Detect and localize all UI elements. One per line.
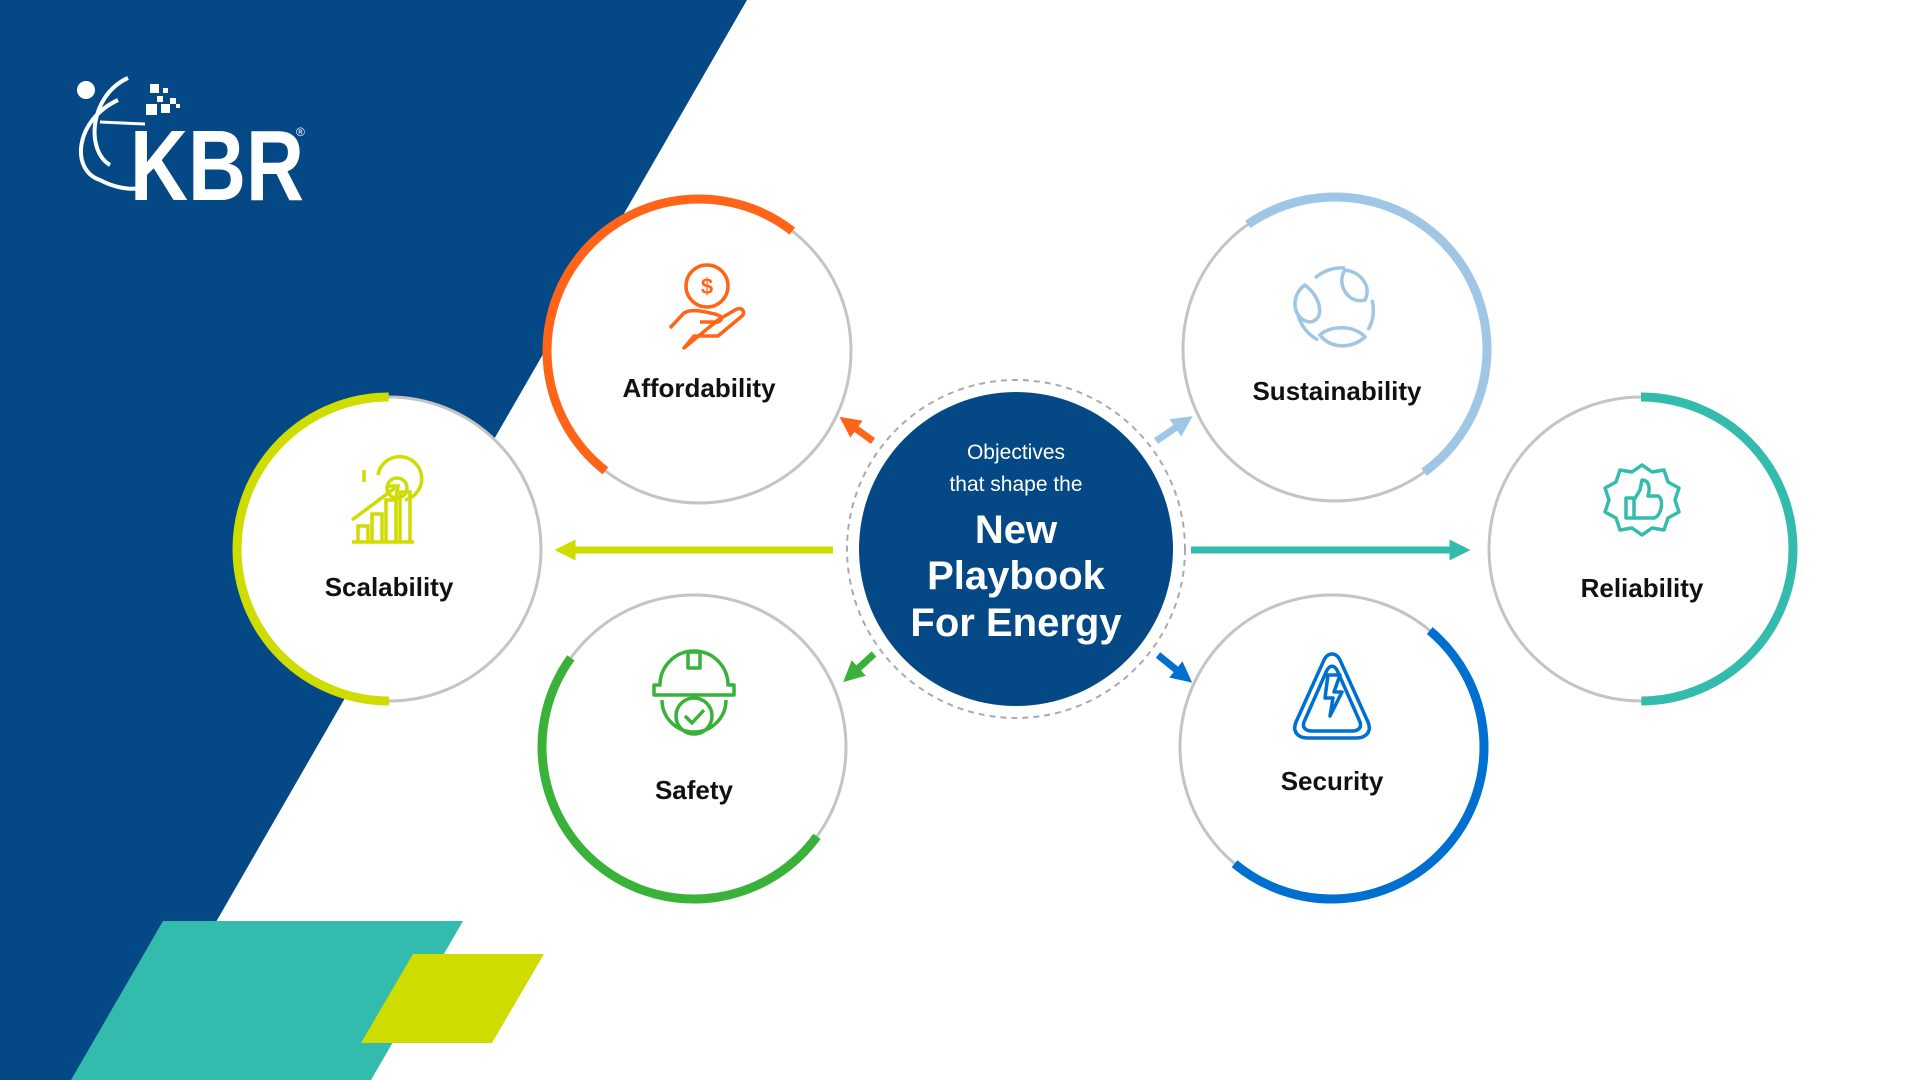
circle: Reliability [1489, 397, 1793, 701]
center circle: that shape the [949, 473, 1083, 496]
background: blue diagonal panel [0, 0, 747, 1080]
logo: KBR: KBR [130, 110, 304, 222]
circle: Reliability: Reliability [1581, 573, 1704, 603]
circle: Security [1118, 533, 1546, 961]
circle: Safety: Safety [655, 775, 734, 805]
logo: KBR [77, 78, 305, 222]
circle: Affordability [486, 138, 912, 564]
circle: Affordability: Affordability [622, 373, 776, 403]
circle: Affordability: $ [701, 274, 713, 299]
decor: lime parallelogram [361, 954, 544, 1043]
circle: Scalability [237, 397, 541, 701]
logo: KBR: ® [296, 125, 305, 139]
circle: Security: Security [1281, 766, 1384, 796]
decor: teal parallelogram [71, 921, 463, 1080]
circle: Sustainability [1123, 137, 1547, 561]
center circle: New [975, 508, 1058, 552]
circle: Scalability: Scalability [325, 572, 454, 602]
center circle: For Energy [910, 601, 1122, 645]
center circle: Objectives [967, 441, 1065, 464]
circle: Sustainability: Sustainability [1252, 376, 1422, 406]
center circle [847, 380, 1185, 718]
arrows [565, 422, 1460, 676]
center circle: Playbook [927, 554, 1106, 598]
circle: Safety [482, 535, 906, 959]
